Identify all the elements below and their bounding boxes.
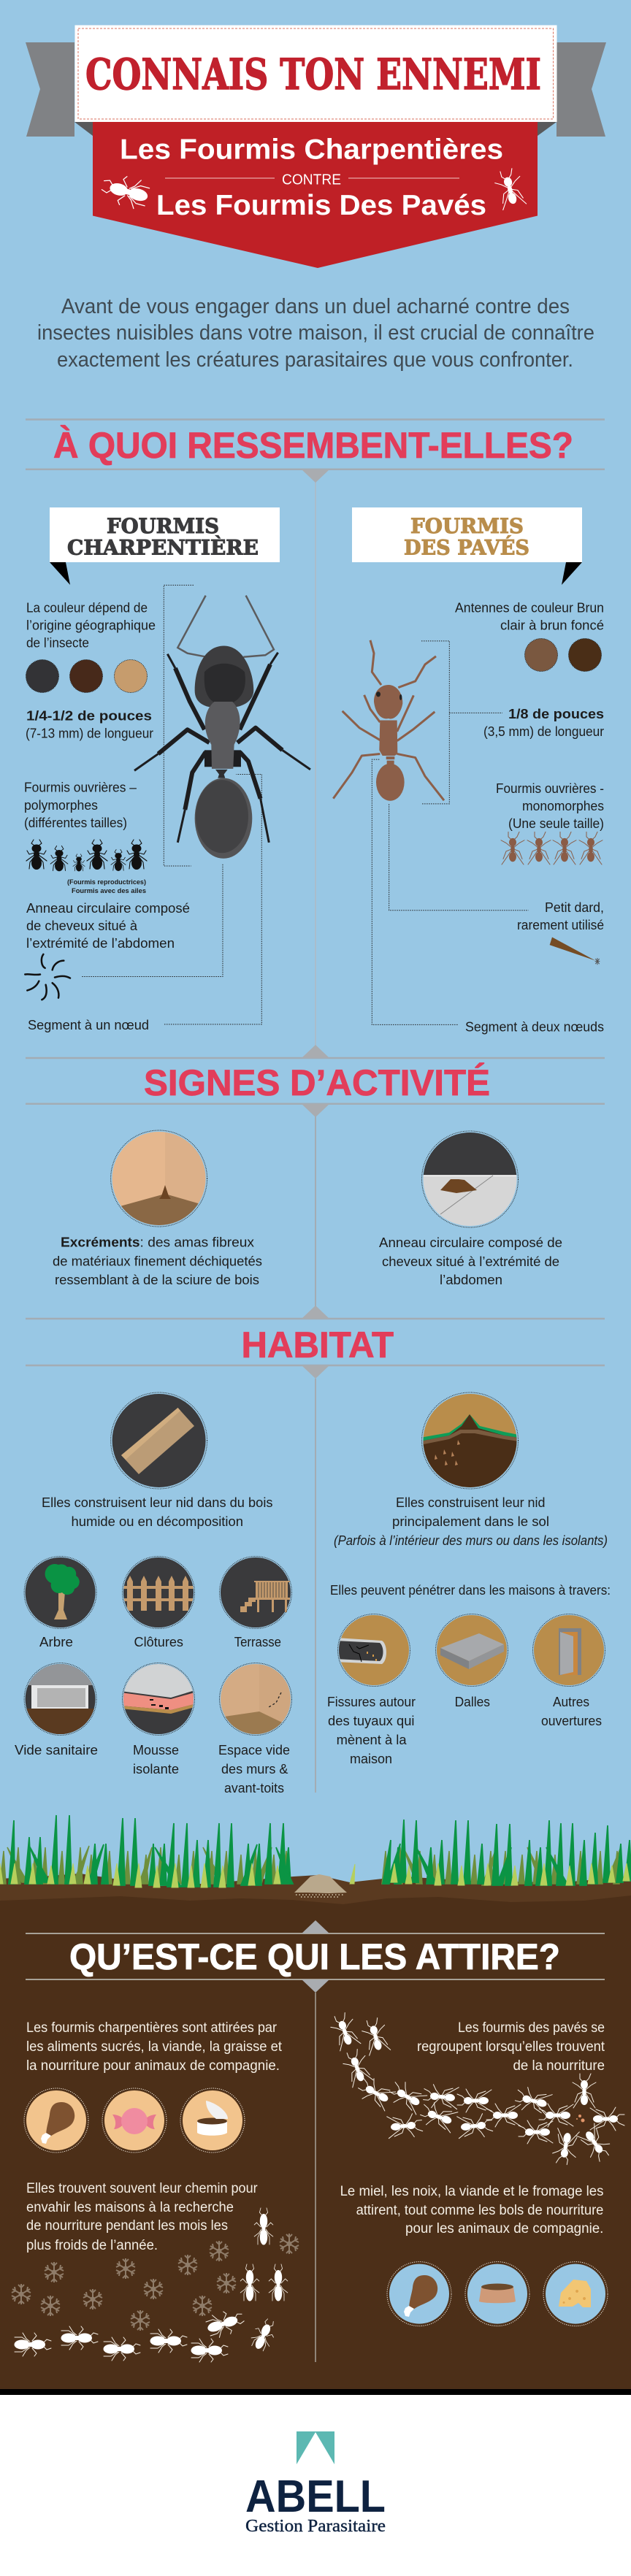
label: clôtures: Clôtures	[134, 1634, 183, 1649]
heading: qu'est-ce qui les attire: QU’EST-CE QUI LES ATTIRE?	[69, 1936, 560, 1977]
white title box	[74, 25, 557, 122]
habitat text: pavement: (Parfois à l’intérieur des murs ou dans les isolants)	[334, 1533, 608, 1548]
text: pavement food: attirent, tout comme les bols de nourriture	[356, 2203, 603, 2218]
label: fissures: Fissures autour	[327, 1694, 416, 1709]
habitat text: pavement	[334, 1495, 608, 1548]
habitat text: pavement: Elles construisent leur nid	[396, 1495, 545, 1510]
text: pavement food: Le miel, les noix, la viande et le fromage les	[340, 2184, 603, 2199]
winged ants note	[67, 878, 146, 895]
text: carpenter attractants: les aliments sucrés, la viande, la graisse et	[26, 2039, 283, 2055]
text: carpenter attractants: Les fourmis charpentières sont attirées par	[26, 2020, 278, 2036]
activity text: ring: Anneau circulaire composé de	[379, 1235, 562, 1250]
icon: crawl space	[22, 1661, 99, 1738]
winged ants note: (Fourmis reproductrices)	[67, 878, 146, 886]
size text	[26, 708, 153, 740]
label: espace vide: Espace vide	[218, 1742, 290, 1757]
food crumbs	[576, 2115, 584, 2122]
intro paragraph: Avant de vous engager dans un duel acharné contre des	[61, 295, 570, 318]
label box: fourmis charpentière: FOURMIS	[107, 514, 219, 538]
workers text: (différentes tailles)	[24, 816, 127, 830]
habitat text: carpenter: humide ou en décomposition	[72, 1514, 243, 1529]
stinger text: rarement utilisé	[517, 918, 604, 932]
section rules and pointers	[26, 419, 605, 1793]
text: carpenter attractants: la nourriture pour animaux de compagnie.	[26, 2058, 280, 2074]
label: mousse isolante: Mousse	[133, 1742, 179, 1757]
label box: fourmis des pavés: DES PAVÉS	[404, 536, 529, 559]
icon: monomorphic workers	[501, 832, 603, 865]
label box: fourmis charpentière	[50, 507, 280, 585]
icon: chicken leg	[24, 2088, 88, 2153]
text: winter: de nourriture pendant les mois les	[26, 2218, 228, 2234]
workers text	[496, 781, 604, 831]
label: espace vide: avant-toits	[224, 1780, 284, 1795]
heading: signes d'activité: SIGNES D’ACTIVITÉ	[144, 1062, 490, 1103]
label: fissures: maison	[350, 1751, 392, 1766]
colour text	[26, 601, 156, 650]
icon: white carpenter ant	[99, 171, 151, 211]
icon: pile on floor	[420, 1128, 522, 1227]
icon: tree	[24, 1557, 96, 1628]
habitat text: pavement: principalement dans le sol	[392, 1514, 549, 1529]
icon: insulating foam	[121, 1661, 197, 1738]
workers text: Fourmis ouvrières -	[496, 781, 604, 796]
big brown ant	[333, 640, 529, 1024]
antenna text: clair à brun foncé	[500, 618, 604, 633]
colour text: La couleur dépend de	[26, 601, 148, 616]
antenna text: Antennes de couleur Brun	[455, 601, 604, 616]
stinger text	[517, 900, 604, 932]
winged ants note: Fourmis avec des ailes	[72, 887, 146, 895]
text: pavement food: pour les animaux de compagnie.	[405, 2221, 603, 2236]
intro paragraph: insectes nuisibles dans votre maison, il est crucial de connaître	[37, 321, 594, 345]
workers text	[24, 780, 137, 830]
text: winter	[26, 2181, 258, 2253]
ring text: l’extrémité de l’abdomen	[26, 936, 175, 951]
workers text: (Une seule taille)	[508, 816, 604, 831]
icon: rotting wood plank	[111, 1392, 207, 1489]
text: pavement attractants: Les fourmis des pavés se	[458, 2020, 605, 2036]
subtitle line one: Les Fourmis Charpentières	[120, 134, 503, 166]
workers text: Fourmis ouvrières –	[24, 780, 137, 794]
icon: fence	[122, 1556, 195, 1629]
label: fissures	[327, 1694, 416, 1766]
icon: candy	[102, 2088, 167, 2153]
activity text: frass	[53, 1235, 262, 1287]
dashed inner border	[78, 28, 554, 119]
habitat text: carpenter: Elles construisent leur nid dans du bois	[42, 1495, 273, 1510]
size text: (7-13 mm) de longueur	[26, 726, 153, 740]
segment text: Segment à un nœud	[28, 1018, 149, 1032]
intro paragraph: exactement les créatures parasitaires que vous confronter.	[57, 348, 573, 372]
activity text: ring: cheveux situé à l’extrémité de	[382, 1254, 559, 1269]
icon: cracked pipe	[336, 1614, 410, 1687]
subtitle line two: Les Fourmis Des Pavés	[156, 190, 486, 221]
antenna text	[455, 601, 604, 633]
label: dalles: Dalles	[455, 1694, 490, 1709]
text: pavement attractants: de la nourriture	[513, 2058, 605, 2074]
ribbon fold shadows	[74, 122, 557, 136]
text: carpenter attractants	[26, 2020, 283, 2074]
intro paragraph	[37, 295, 594, 372]
logo mark	[297, 2431, 334, 2464]
label box: fourmis des pavés	[352, 507, 582, 585]
label box: fourmis charpentière: CHARPENTIÈRE	[67, 536, 259, 559]
label box: fourmis des pavés: FOURMIS	[410, 514, 524, 538]
snowflakes	[12, 2234, 299, 2331]
segment text: Segment à deux nœuds	[465, 1019, 604, 1034]
label: mousse isolante	[133, 1742, 179, 1776]
contre divider: CONTRE	[282, 172, 341, 188]
label: mousse isolante: isolante	[133, 1761, 179, 1776]
white ants marching	[15, 2208, 288, 2362]
icon: concrete slab	[435, 1614, 508, 1687]
icon: chicken leg blue	[387, 2262, 451, 2326]
icon: frass in wall corner	[110, 1130, 209, 1227]
colour swatches	[26, 660, 148, 692]
soil	[0, 1874, 631, 2389]
section rules on soil	[26, 1920, 605, 2362]
ring text: Anneau circulaire composé	[26, 901, 190, 916]
text: winter: Elles trouvent souvent leur chemin pour	[26, 2181, 258, 2196]
label: autres ouvertures	[541, 1694, 602, 1728]
text: pavement attractants	[417, 2020, 605, 2074]
panel: carpenter ant	[24, 507, 310, 1032]
size text: (3,5 mm) de longueur	[483, 724, 604, 739]
ant trail to food	[328, 2011, 624, 2166]
icon: cheese	[543, 2262, 608, 2326]
workers text: polymorphes	[24, 798, 98, 813]
ring text: de cheveux situé à	[26, 919, 138, 933]
icon: door	[533, 1614, 605, 1687]
colour swatches	[524, 638, 602, 672]
icon: polymorphic workers	[26, 840, 147, 871]
size text: 1/4-1/2 de pouces	[26, 708, 152, 723]
footer divider	[0, 2389, 631, 2576]
workers text: monomorphes	[522, 799, 604, 813]
label: espace vide: des murs &	[221, 1761, 288, 1776]
activity text: frass: de matériaux finement déchiquetés	[53, 1254, 262, 1269]
label: fissures: des tuyaux qui	[328, 1713, 415, 1728]
size text	[483, 707, 604, 739]
label: terrasse: Terrasse	[234, 1634, 281, 1649]
ant mound	[294, 1874, 347, 1897]
logo: gestion parasitaire: Gestion Parasitaire	[245, 2517, 386, 2536]
big black ant	[82, 585, 310, 1024]
logo: abell: ABELL	[245, 2472, 386, 2522]
stinger text: Petit dard,	[545, 900, 604, 915]
heading: habitat: HABITAT	[241, 1325, 394, 1365]
activity text: ring: l’abdomen	[440, 1272, 502, 1287]
icon: pet bowl	[465, 2262, 529, 2326]
icon: soil nest	[420, 1391, 522, 1493]
panel: pavement ant	[333, 507, 604, 1034]
entry heading: Elles peuvent pénétrer dans les maisons à travers:	[330, 1582, 611, 1598]
label: autres ouvertures: Autres	[553, 1694, 589, 1709]
label: fissures: mènent à la	[337, 1732, 407, 1747]
activity text: ring	[379, 1235, 562, 1287]
label: arbre: Arbre	[39, 1634, 73, 1649]
icon: white pavement ant	[492, 167, 527, 210]
activity text: frass: Excréments: des amas fibreux	[61, 1235, 255, 1250]
text: winter: plus froids de l’année.	[26, 2238, 158, 2253]
heading: à quoi ressemblent-elles: À QUOI RESSEMBENT-ELLES?	[53, 425, 573, 466]
icon: hair ring	[25, 954, 70, 1000]
ring text	[26, 901, 190, 951]
colour text: l’origine géographique	[26, 618, 156, 633]
habitat text: carpenter	[42, 1495, 273, 1529]
grey ribbon	[26, 42, 606, 137]
label: autres ouvertures: ouvertures	[541, 1713, 602, 1728]
grass	[0, 1815, 631, 1887]
activity text: frass: ressemblant à de la sciure de bois	[55, 1272, 259, 1287]
size text: 1/8 de pouces	[508, 707, 604, 721]
icon: deck	[219, 1557, 292, 1628]
colour text: de l’insecte	[26, 635, 89, 650]
icon: wall void	[219, 1661, 296, 1738]
header banner	[26, 25, 606, 268]
label: vide sanitaire: Vide sanitaire	[15, 1742, 98, 1757]
text: pavement food	[340, 2184, 603, 2236]
icon: stinger	[550, 937, 600, 965]
red pennant	[93, 122, 538, 268]
label: espace vide	[218, 1742, 290, 1795]
text: winter: envahir les maisons à la recherche	[26, 2200, 234, 2215]
text: pavement attractants: regroupent lorsqu’elles trouvent	[417, 2039, 605, 2055]
icon: pet food can	[180, 2088, 245, 2153]
